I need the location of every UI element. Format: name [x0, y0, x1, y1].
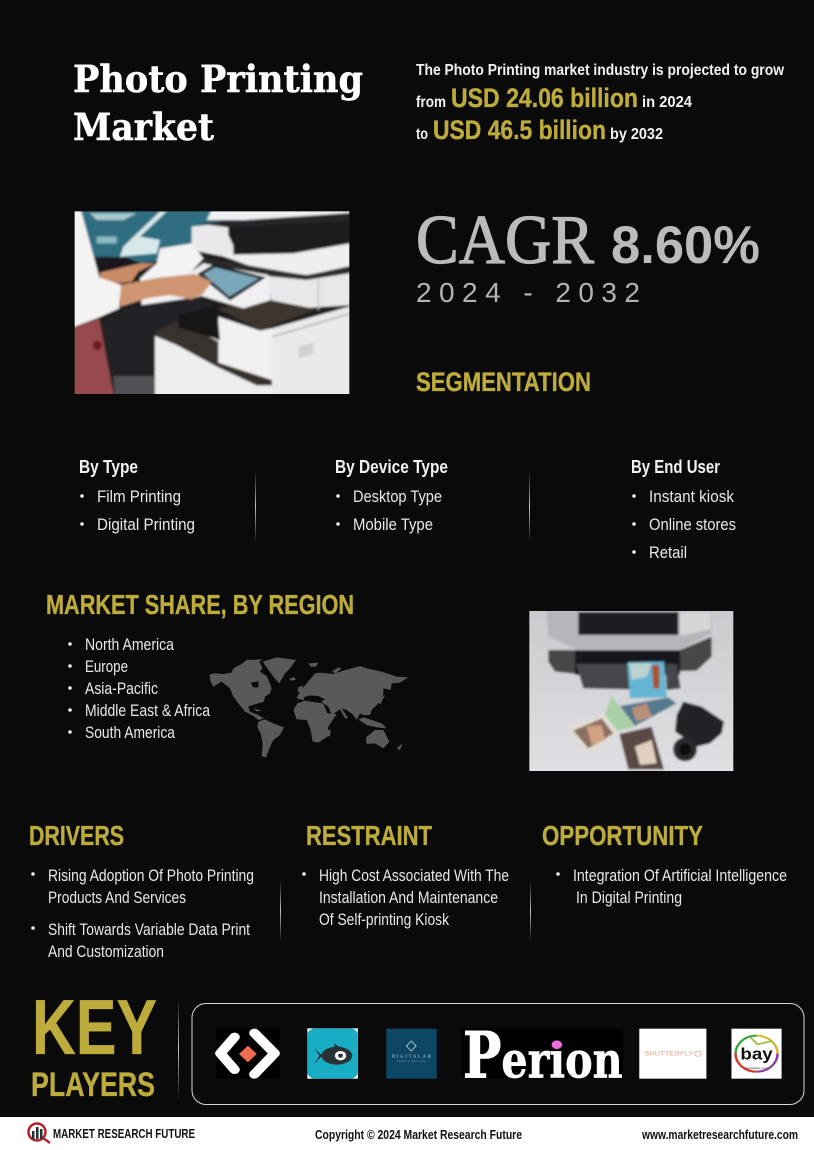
opportunity list: In Digital Printing [576, 889, 682, 907]
region list [68, 636, 211, 742]
drivers list [31, 867, 254, 961]
restraint list: Of Self-printing Kiosk [319, 911, 450, 929]
heading: restraint: RESTRAINT [306, 820, 432, 851]
region list: North America [85, 636, 175, 654]
segment: by device type [335, 456, 448, 534]
drivers list: Products And Services [48, 889, 186, 907]
segment: by device type: By Device Type [335, 456, 448, 477]
market projection text: USD 24.06 billion [451, 83, 638, 113]
region list: Asia-Pacific [85, 680, 158, 698]
photo: office printer touchscreen [70, 207, 353, 400]
logo: diamond brackets [216, 1029, 279, 1079]
logo: bay [731, 1029, 782, 1079]
title: Market [73, 105, 214, 149]
logo: shutterfly: SHUTTERFLY [644, 1051, 694, 1057]
opportunity list [556, 867, 787, 907]
heading: segmentation: SEGMENTATION [416, 367, 591, 397]
logo: fish [307, 1028, 358, 1079]
market projection text [416, 62, 784, 145]
logo: perion [462, 1018, 623, 1093]
paper and hands [140, 243, 203, 305]
shirt and apron [70, 207, 121, 328]
logo: perion: erion [501, 1031, 623, 1090]
region list: Middle East & Africa [85, 702, 211, 720]
logo: bay: bay [740, 1044, 773, 1063]
segment: by end user: Instant kiosk [649, 488, 735, 506]
logo: shutterfly [639, 1029, 706, 1079]
market projection text: from [416, 94, 446, 111]
CAGR figure [416, 202, 760, 308]
drivers list: Rising Adoption Of Photo Printing [48, 867, 254, 885]
heading: drivers: DRIVERS [29, 820, 124, 851]
key players heading: PLAYERS [31, 1066, 155, 1104]
footer bar: MARKET RESEARCH FUTURE [53, 1126, 195, 1141]
market projection text: by 2032 [610, 126, 663, 143]
market projection text: in 2024 [642, 94, 692, 111]
drivers list: And Customization [48, 943, 164, 961]
key players heading: KEY [32, 983, 157, 1071]
logo: perion: P [463, 1018, 501, 1093]
heading: market share by region: MARKET SHARE, BY REGION [46, 589, 354, 620]
world map [209, 657, 408, 757]
heading: opportunity: OPPORTUNITY [542, 820, 703, 851]
segment: by end user: By End User [631, 456, 720, 477]
drivers list: Shift Towards Variable Data Print [48, 921, 250, 939]
title [73, 57, 363, 149]
region list: South America [85, 724, 176, 742]
touch panel [192, 263, 271, 308]
title: Photo Printing [73, 57, 363, 101]
restraint list: Installation And Maintenance [319, 889, 498, 907]
restraint list: High Cost Associated With The [319, 867, 509, 885]
key players logo panel [192, 1004, 804, 1104]
segment: by type: Digital Printing [97, 516, 195, 534]
logo: digitalab: PRINT & SELL INC [397, 1061, 426, 1063]
key players heading [31, 983, 157, 1104]
CAGR figure: 2024 - 2032 [416, 277, 640, 308]
segment: by type: Film Printing [97, 488, 181, 506]
CAGR figure: CAGR [416, 202, 594, 279]
logo: digitalab [386, 1029, 437, 1079]
region list: Europe [85, 658, 128, 676]
segment: by device type: Desktop Type [353, 488, 442, 506]
segment: by end user: Online stores [649, 516, 736, 534]
footer bar: Copyright © 2024 Market Research Future [315, 1127, 522, 1142]
photo: photo printer with prints and camera [529, 611, 734, 771]
icon: market research future magnifier [28, 1124, 50, 1143]
segment: by end user: Retail [649, 544, 687, 562]
machine [192, 222, 233, 258]
logo: digitalab: DIGITALAB [392, 1054, 431, 1059]
restraint list [302, 867, 509, 929]
segment: by end user [631, 456, 736, 562]
market projection text: USD 46.5 billion [433, 115, 606, 145]
footer bar [0, 1117, 814, 1150]
CAGR figure: 8.60% [611, 216, 760, 275]
segment: by type [79, 456, 195, 534]
logo: bay: bayphoto.com [745, 1066, 768, 1070]
segment: by type: By Type [79, 456, 138, 477]
segment: by device type: Mobile Type [353, 516, 433, 534]
market projection text: to [416, 126, 428, 143]
